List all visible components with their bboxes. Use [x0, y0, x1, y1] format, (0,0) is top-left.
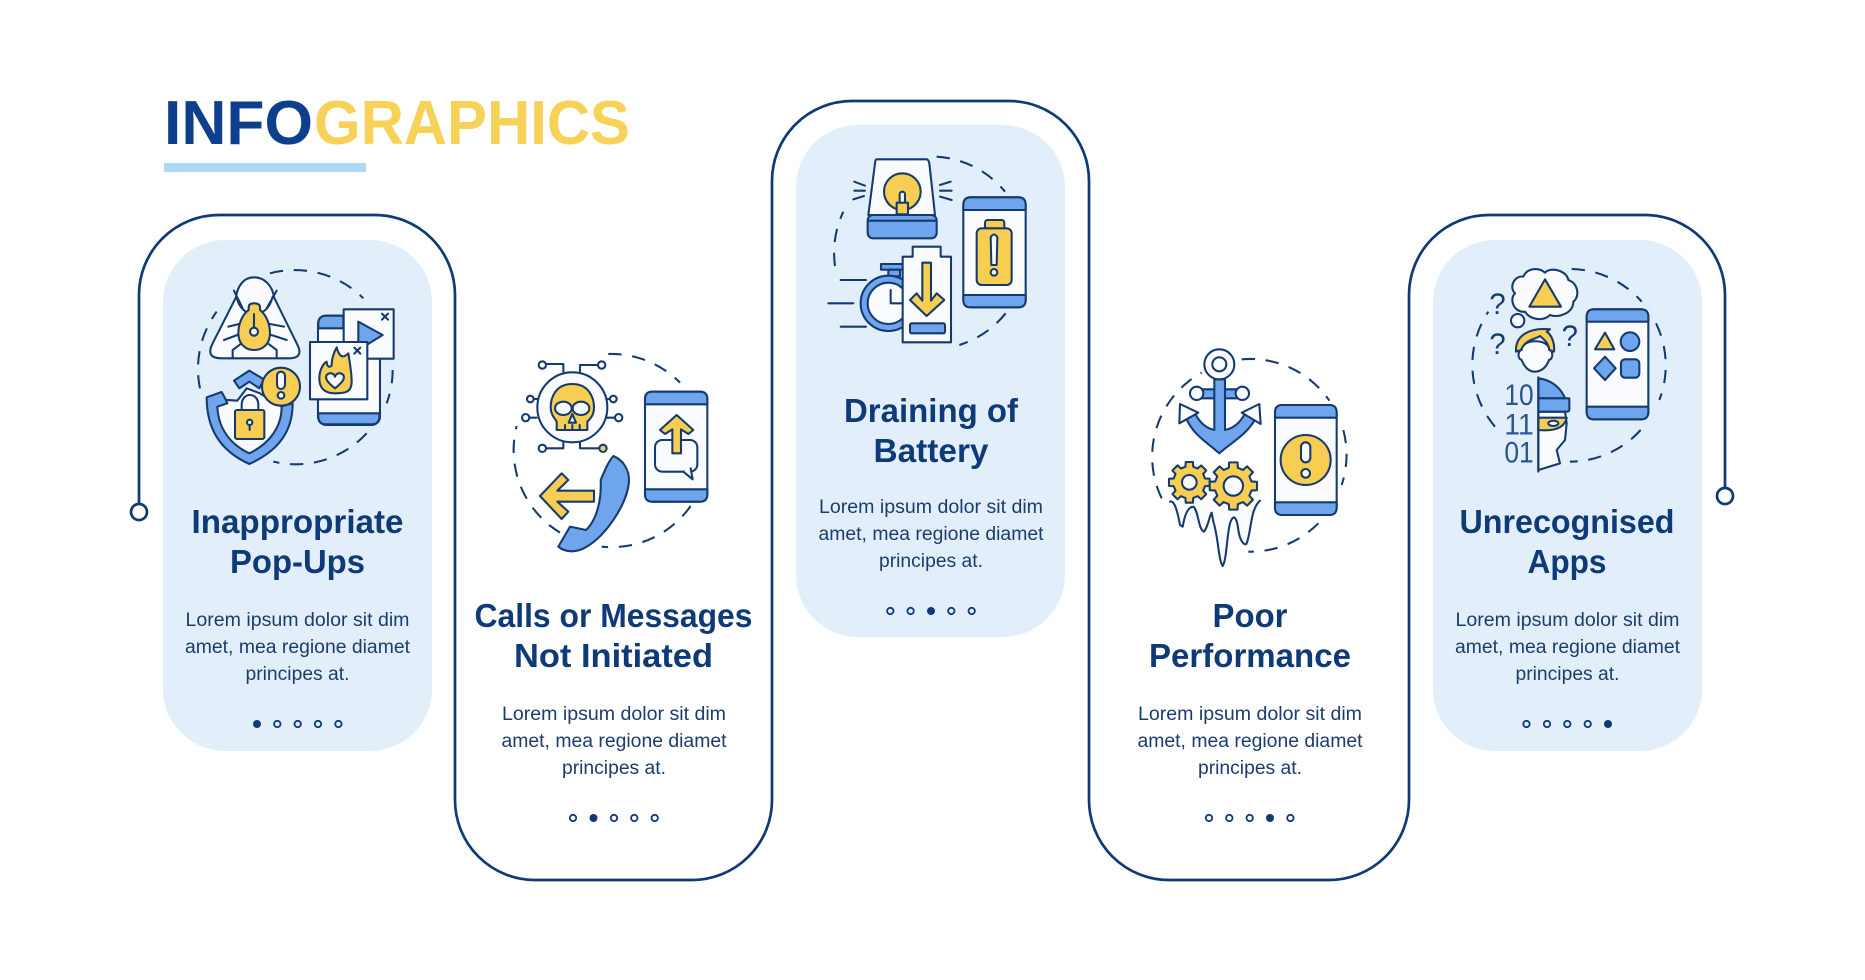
icon: confused user, hacker, app phone: 01 [1504, 437, 1534, 470]
body text: principes at. [562, 758, 666, 779]
panel: poor performance [1138, 349, 1363, 822]
body text: Lorem ipsum dolor sit dim [186, 610, 410, 631]
title [164, 89, 630, 158]
body text [818, 497, 1044, 572]
pagination dots [1206, 814, 1294, 822]
body text [185, 610, 411, 685]
body text: amet, mea regione diamet [502, 731, 727, 752]
title underline bar [164, 163, 366, 172]
icon: confused user, hacker, app phone [1472, 269, 1666, 472]
heading: Draining of [844, 392, 1019, 429]
panel: inappropriate pop-ups [163, 240, 432, 751]
icon: confused user, hacker, app phone: ? [1562, 320, 1578, 353]
title: GRAPHICS [314, 89, 630, 158]
body text: principes at. [879, 551, 983, 572]
panel: draining of battery [796, 125, 1065, 637]
heading: Inappropriate [192, 503, 404, 540]
body text [502, 704, 727, 779]
heading: Apps [1528, 543, 1606, 580]
icon: anchor, frozen gears, phone alert [1152, 349, 1347, 566]
body text: amet, mea regione diamet [1455, 637, 1681, 658]
body text: principes at. [1516, 664, 1620, 685]
heading: Poor [1212, 597, 1288, 634]
heading [844, 392, 1019, 469]
body text: amet, mea regione diamet [185, 637, 411, 658]
body text: amet, mea regione diamet [1138, 731, 1363, 752]
body text [1455, 610, 1681, 685]
heading [192, 503, 404, 580]
connecting outline [131, 101, 1733, 880]
body text: principes at. [246, 664, 350, 685]
body text: amet, mea regione diamet [818, 524, 1044, 545]
panel: unrecognised apps [1433, 240, 1702, 751]
pagination dots [1523, 720, 1612, 728]
heading [474, 597, 752, 674]
icon: confused user, hacker, app phone: 10 [1504, 379, 1534, 412]
body text: principes at. [1198, 758, 1302, 779]
panel: calls or messages not initiated [474, 354, 752, 822]
heading: Unrecognised [1460, 503, 1674, 540]
body text: Lorem ipsum dolor sit dim [1456, 610, 1680, 631]
icon: beacon, stopwatch, battery, phone [828, 157, 1026, 345]
body text: Lorem ipsum dolor sit dim [1138, 704, 1362, 725]
heading: Performance [1149, 637, 1351, 674]
pagination dots [253, 720, 342, 728]
body text: Lorem ipsum dolor sit dim [502, 704, 726, 725]
card background [163, 240, 432, 751]
body text [1138, 704, 1363, 779]
icon: confused user, hacker, app phone: 11 [1504, 408, 1534, 441]
body text: Lorem ipsum dolor sit dim [819, 497, 1043, 518]
heading [1460, 503, 1674, 580]
heading: Battery [874, 432, 989, 469]
icon: bug, broken shield, pop-up phone [198, 270, 394, 464]
pagination dots [887, 607, 975, 615]
heading: Not Initiated [514, 637, 713, 674]
title: INFO [164, 89, 313, 158]
pagination dots [570, 814, 658, 822]
icon: confused user, hacker, app phone: ? [1489, 288, 1506, 321]
card background [1433, 240, 1702, 751]
heading [1149, 597, 1351, 674]
heading: Calls or Messages [474, 597, 752, 634]
card background [796, 125, 1065, 637]
icon: confused user, hacker, app phone: ? [1489, 328, 1506, 361]
icon: skull, handset, phone with message [514, 354, 707, 551]
heading: Pop-Ups [230, 543, 365, 580]
